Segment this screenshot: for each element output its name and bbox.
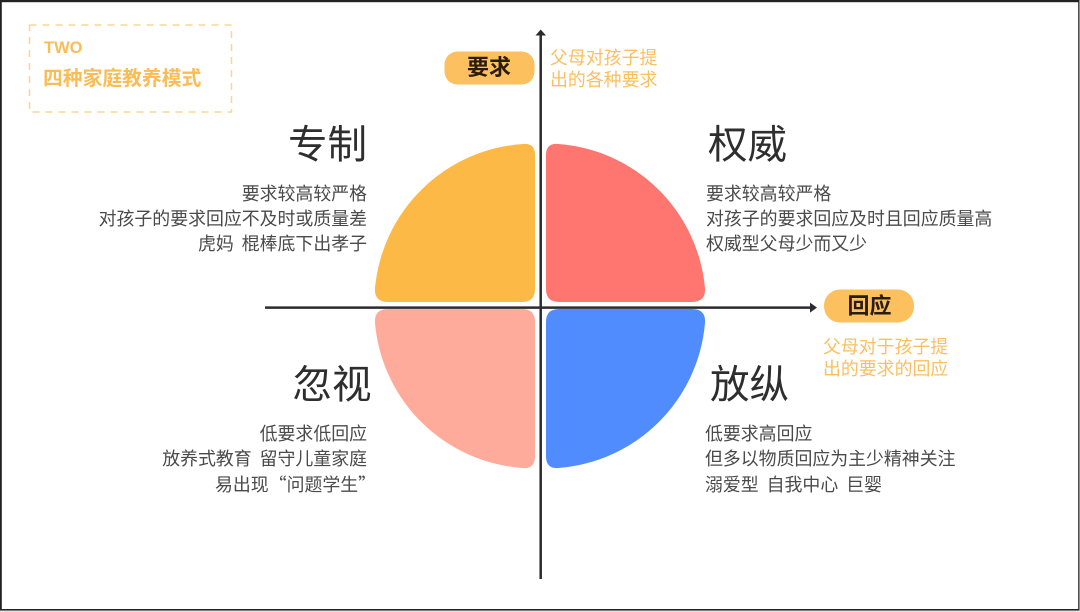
title label: TWO: TWO: [44, 39, 83, 57]
response description: [823, 337, 948, 379]
vertical axis arrow: [536, 30, 546, 579]
heading: authoritarian: 专制: [288, 124, 367, 168]
title box: [30, 25, 232, 112]
text: permissive: [705, 424, 956, 495]
heading: neglectful: 忽视: [292, 364, 372, 408]
text: permissive: 低要求高回应: [705, 424, 812, 444]
text: neglectful: 放养式教育 留守儿童家庭: [162, 449, 367, 469]
quadrant: permissive blue: [546, 309, 705, 468]
response description: 父母对于孩子提: [823, 337, 948, 357]
response pill: 回应: [847, 294, 892, 318]
title text: 四种家庭教养模式: [43, 67, 201, 90]
text: authoritative: 对孩子的要求回应及时且回应质量高: [706, 209, 992, 229]
text: authoritarian: [99, 184, 367, 254]
text: permissive: 溺爱型 自我中心 巨婴: [705, 475, 882, 495]
quadrant: neglectful pink: [375, 309, 535, 468]
text: neglectful: 低要求低回应: [260, 424, 367, 444]
text: permissive: 但多以物质回应为主少精神关注: [705, 449, 956, 469]
text: authoritarian: 对孩子的要求回应不及时或质量差: [99, 209, 367, 229]
text: neglectful: [162, 424, 376, 497]
demand description: [550, 48, 657, 90]
response description: 出的要求的回应: [823, 359, 948, 379]
horizontal axis arrow: [265, 303, 817, 313]
text: authoritative: [706, 184, 992, 254]
demand description: 出的各种要求: [550, 70, 657, 90]
quadrant: authoritarian orange: [375, 144, 535, 302]
text: authoritarian: 虎妈 棍棒底下出孝子: [198, 234, 367, 254]
demand description: 父母对孩子提: [550, 48, 657, 68]
heading: permissive: 放纵: [710, 364, 789, 408]
response pill: [824, 290, 914, 322]
text: neglectful: 易出现“问题学生”: [215, 471, 376, 497]
text: authoritarian: 要求较高较严格: [242, 184, 367, 204]
text: authoritative: 权威型父母少而又少: [706, 234, 867, 254]
heading: authoritative: 权威: [708, 124, 787, 168]
demand pill: [444, 52, 534, 84]
quadrant: authoritative red: [546, 144, 705, 302]
demand pill: 要求: [467, 55, 511, 80]
text: authoritative: 要求较高较严格: [706, 184, 831, 204]
